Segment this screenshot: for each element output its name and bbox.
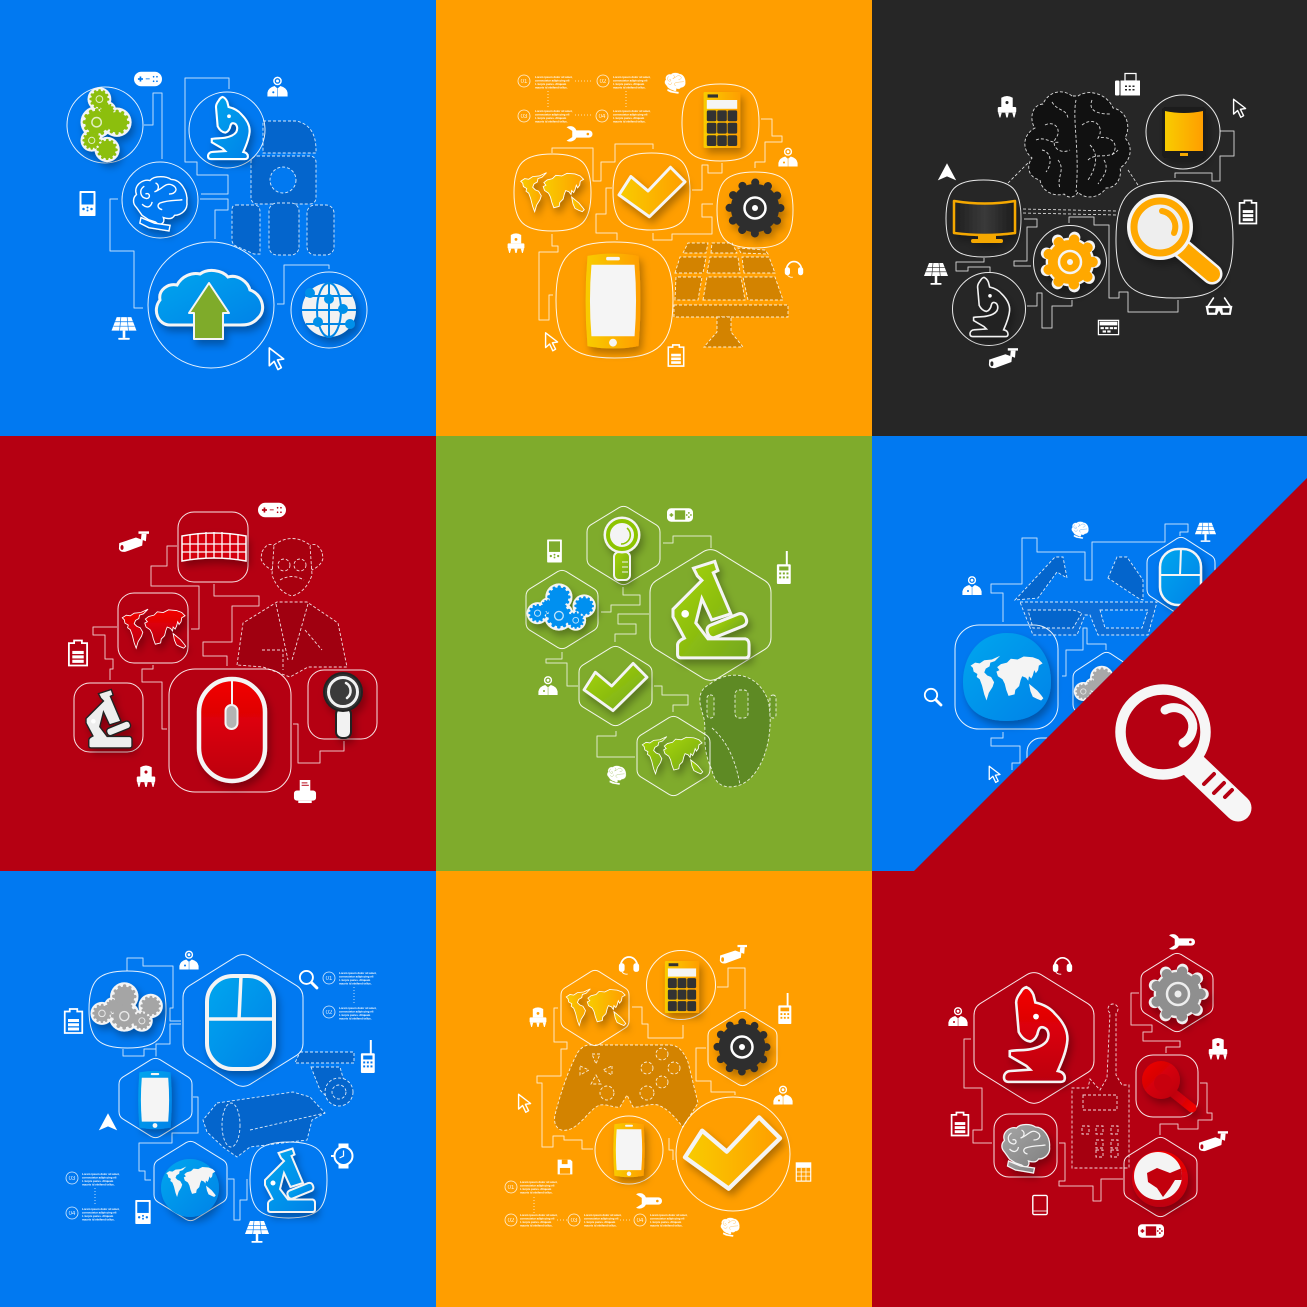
globe tile xyxy=(955,625,1058,729)
steps infographic left: Lorem ipsum dolor sit amet, xyxy=(82,1207,120,1211)
magnifier tile xyxy=(308,670,377,739)
panel: blue and red diagonal xyxy=(872,436,1307,871)
connector lines xyxy=(539,119,782,320)
icon: brain xyxy=(721,1218,740,1237)
steps infographic right: 01 xyxy=(326,976,333,982)
steps infographic right xyxy=(323,971,377,1020)
panel: blue mouse xyxy=(0,871,436,1307)
icon: robot xyxy=(530,1007,546,1027)
microscope hexagon xyxy=(974,973,1094,1103)
icon: cursor xyxy=(1234,99,1246,117)
icon: brain xyxy=(1071,522,1089,539)
steps infographic right: 02 xyxy=(326,1010,333,1016)
steps infographic xyxy=(518,75,651,124)
panel 6 background xyxy=(872,436,1307,871)
microscope circle xyxy=(189,92,265,168)
steps infographic left: t. turpis purus. Aliquam xyxy=(82,1214,114,1218)
icon: battery xyxy=(1240,200,1256,224)
steps infographic left xyxy=(66,1172,120,1222)
steps infographic: consectetur adipiscing eli xyxy=(584,1216,619,1220)
icon: glasses xyxy=(1206,298,1232,315)
icon: doctor xyxy=(962,577,982,595)
steps infographic right: t. turpis purus. Aliquam xyxy=(339,1013,371,1017)
steps infographic xyxy=(505,1180,688,1228)
steps infographic: t. turpis purus. Aliquam xyxy=(584,1220,616,1224)
steps infographic: 03 xyxy=(571,1218,578,1224)
icon: gamepad xyxy=(258,503,286,517)
gears hexagon xyxy=(526,570,598,649)
connector lines xyxy=(93,546,344,763)
icon: psp xyxy=(1138,1224,1164,1238)
dashed solar panel xyxy=(674,243,788,347)
dashed gamepad xyxy=(555,1045,698,1130)
connector lines xyxy=(546,536,711,757)
steps infographic: Lorem ipsum dolor sit amet, xyxy=(613,109,651,113)
steps infographic: consectetur adipiscing eli xyxy=(613,112,648,116)
check circle xyxy=(676,1097,790,1211)
steps infographic right: t. turpis purus. Aliquam xyxy=(339,978,371,982)
steps infographic right: Lorem ipsum dolor sit amet, xyxy=(339,1006,377,1010)
map hexagon xyxy=(637,716,710,796)
icon: printer xyxy=(294,780,316,803)
steps infographic: 02 xyxy=(600,79,607,85)
panel 8 background xyxy=(436,871,872,1307)
monitor squircle xyxy=(946,180,1021,257)
panel 2 background xyxy=(436,0,872,436)
icon: cursor xyxy=(519,1094,531,1112)
steps infographic right: consectetur adipiscing eli xyxy=(339,974,374,978)
icon: battery xyxy=(69,641,87,665)
steps infographic: mauris id eleifend tellus. xyxy=(613,120,646,124)
icon: navigation arrow xyxy=(938,163,956,180)
globe hexagon xyxy=(1124,1137,1197,1217)
icon: brain xyxy=(607,766,626,785)
steps infographic: t. turpis purus. Aliquam xyxy=(535,82,567,86)
dashed camera xyxy=(203,1052,354,1157)
icon: floppy xyxy=(558,1160,572,1174)
steps infographic: Lorem ipsum dolor sit amet, xyxy=(584,1213,622,1217)
mouse hexagon xyxy=(1147,537,1215,615)
panel 4 background xyxy=(0,436,436,871)
steps infographic: consectetur adipiscing eli xyxy=(535,78,570,82)
check squircle xyxy=(613,153,690,230)
big magnifier icon xyxy=(1120,690,1238,808)
check hexagon xyxy=(579,646,652,726)
icon: gamepad xyxy=(134,72,162,86)
steps infographic: consectetur adipiscing eli xyxy=(650,1216,685,1220)
steps infographic: Lorem ipsum dolor sit amet, xyxy=(535,75,573,79)
icon: headset xyxy=(1053,958,1072,974)
steps infographic: 02 xyxy=(508,1218,515,1224)
microscope hexagon xyxy=(650,550,771,680)
steps infographic: 04 xyxy=(599,114,606,120)
globe hexagon xyxy=(154,1141,227,1221)
connector lines xyxy=(964,993,1212,1201)
icon: camera xyxy=(989,348,1018,368)
panel: orange phone xyxy=(436,0,872,436)
icon: fax xyxy=(1115,74,1140,96)
microscope circle xyxy=(952,272,1026,346)
gears circle xyxy=(67,87,143,163)
icon: cursor xyxy=(269,348,284,370)
steps infographic: 04 xyxy=(637,1218,644,1224)
icon: solar panel xyxy=(245,1221,269,1243)
connector lines xyxy=(991,524,1188,770)
icon: headset xyxy=(619,957,639,974)
panel 9 background xyxy=(872,871,1307,1307)
magnifier hexagon xyxy=(587,506,660,585)
microscope squircle xyxy=(250,1142,327,1218)
icon: keyboard xyxy=(1098,320,1119,335)
steps infographic: 01 xyxy=(508,1185,515,1191)
steps infographic: Lorem ipsum dolor sit amet, xyxy=(613,75,651,79)
icon: watch xyxy=(331,1144,352,1168)
icon: navigation arrow xyxy=(99,1113,117,1130)
gears hexagon xyxy=(1072,652,1124,710)
icon: solar panel xyxy=(112,317,136,340)
magnifier tile xyxy=(1136,1055,1198,1117)
icon: headset xyxy=(785,262,803,277)
gear circle xyxy=(1034,226,1106,298)
mouse hexagon xyxy=(183,955,303,1086)
icon: psp xyxy=(667,508,693,522)
steps infographic: mauris id eleifend tellus. xyxy=(650,1224,683,1228)
icon: calculator xyxy=(796,1163,811,1181)
icon: magnifier xyxy=(300,971,317,988)
icon: doctor xyxy=(778,148,798,166)
globe circle xyxy=(291,272,367,348)
steps infographic: consectetur adipiscing eli xyxy=(613,78,648,82)
microscope tile xyxy=(74,683,143,752)
icon: handheld xyxy=(135,1200,151,1224)
icon: battery xyxy=(65,1009,82,1033)
phone circle xyxy=(595,1116,663,1184)
connector lines xyxy=(537,968,745,1160)
icon: walkie talkie xyxy=(361,1040,375,1073)
steps infographic left: consectetur adipiscing eli xyxy=(82,1176,117,1180)
steps infographic: mauris id eleifend tellus. xyxy=(535,120,568,124)
steps infographic: mauris id eleifend tellus. xyxy=(520,1190,553,1194)
brain circle xyxy=(122,162,198,238)
panel 3 background xyxy=(872,0,1307,436)
icon: battery xyxy=(668,345,684,366)
phone hexagon xyxy=(119,1058,192,1138)
icon: robot xyxy=(508,233,524,253)
steps infographic: t. turpis purus. Aliquam xyxy=(613,82,645,86)
icon: cursor xyxy=(546,333,558,351)
icon: handheld xyxy=(547,540,562,562)
dashed person xyxy=(237,538,347,677)
gear squircle xyxy=(717,172,793,248)
steps infographic left: Lorem ipsum dolor sit amet, xyxy=(82,1172,120,1176)
steps infographic: Lorem ipsum dolor sit amet, xyxy=(535,109,573,113)
panel: dark magnifier xyxy=(872,0,1307,436)
icon: walkie talkie xyxy=(777,551,791,584)
keypad circle xyxy=(646,950,716,1020)
icon: doctor xyxy=(948,1008,968,1026)
icon: wrench xyxy=(567,126,593,142)
keypad squircle xyxy=(682,84,759,161)
icon: robot xyxy=(1209,1038,1227,1060)
steps infographic: Lorem ipsum dolor sit amet, xyxy=(650,1213,688,1217)
steps infographic: Lorem ipsum dolor sit amet, xyxy=(520,1213,558,1217)
magnifier squircle xyxy=(1116,181,1233,298)
mouse tile xyxy=(169,669,291,792)
steps infographic: 03 xyxy=(521,114,528,120)
icon: doctor xyxy=(773,1086,793,1104)
steps infographic: mauris id eleifend tellus. xyxy=(613,86,646,90)
steps infographic: consectetur adipiscing eli xyxy=(520,1216,555,1220)
dashed mouse xyxy=(700,675,776,787)
steps infographic: t. turpis purus. Aliquam xyxy=(650,1220,682,1224)
icon: battery xyxy=(952,1112,968,1136)
icon: doctor xyxy=(538,677,558,695)
tablet circle xyxy=(1146,95,1220,169)
steps infographic: Lorem ipsum dolor sit amet, xyxy=(520,1180,558,1184)
panel: green microscope xyxy=(436,436,872,871)
icon: camera xyxy=(1199,1131,1228,1151)
icon: wrench xyxy=(636,1193,662,1209)
map hexagon xyxy=(561,970,629,1046)
steps infographic: t. turpis purus. Aliquam xyxy=(613,116,645,120)
steps infographic right: mauris id eleifend tellus. xyxy=(339,1016,372,1020)
icon: handheld xyxy=(80,191,96,216)
gear hexagon xyxy=(708,1011,777,1086)
connector lines xyxy=(123,958,247,1220)
icon: walkie talkie xyxy=(778,993,791,1024)
clipped blue content xyxy=(925,522,1216,798)
icon: doctor xyxy=(267,77,288,96)
steps infographic: mauris id eleifend tellus. xyxy=(520,1224,553,1228)
icon: camera xyxy=(119,531,149,552)
icon: robot xyxy=(137,765,155,787)
connector lines xyxy=(956,131,1234,328)
steps infographic: consectetur adipiscing eli xyxy=(535,112,570,116)
panel 7 background xyxy=(0,871,436,1307)
steps infographic: mauris id eleifend tellus. xyxy=(535,86,568,90)
icon: doctor xyxy=(179,951,199,970)
icon: tablet xyxy=(1033,1195,1047,1215)
steps infographic left: 03 xyxy=(69,1176,76,1182)
brain tile xyxy=(994,1114,1057,1177)
steps infographic: t. turpis purus. Aliquam xyxy=(520,1187,552,1191)
steps infographic: mauris id eleifend tellus. xyxy=(584,1224,617,1228)
keyboard tile xyxy=(178,512,248,582)
steps infographic right: mauris id eleifend tellus. xyxy=(339,982,372,986)
panel 5 background xyxy=(436,436,872,871)
panel 1 background xyxy=(0,0,436,436)
icon: cursor xyxy=(989,766,1000,782)
partial hexagon xyxy=(1026,738,1048,758)
steps infographic: consectetur adipiscing eli xyxy=(520,1184,555,1188)
panel: red microscope xyxy=(872,871,1307,1307)
cloud upload circle xyxy=(148,242,274,368)
gears squircle xyxy=(89,971,166,1048)
icon: magnifier xyxy=(925,689,941,705)
steps infographic right: consectetur adipiscing eli xyxy=(339,1010,374,1014)
dashed glasses xyxy=(1015,557,1157,635)
phone squircle xyxy=(556,242,673,358)
connector lines xyxy=(110,78,329,308)
panel: blue cloud upload xyxy=(0,0,436,436)
steps infographic left: mauris id eleifend tellus. xyxy=(82,1218,115,1222)
dashed walkie talkie xyxy=(1072,1004,1129,1168)
icon: solar panel xyxy=(1195,523,1216,542)
map squircle xyxy=(514,154,591,231)
steps infographic left: mauris id eleifend tellus. xyxy=(82,1182,115,1186)
map tile xyxy=(118,593,188,663)
steps infographic: t. turpis purus. Aliquam xyxy=(520,1220,552,1224)
steps infographic left: consectetur adipiscing eli xyxy=(82,1210,117,1214)
icon: robot xyxy=(998,96,1016,118)
steps infographic: 01 xyxy=(521,79,528,85)
dashed brain xyxy=(1008,92,1138,215)
steps infographic right: Lorem ipsum dolor sit amet, xyxy=(339,971,377,975)
panel: orange gamepad xyxy=(436,871,872,1307)
icon: solar panel xyxy=(924,263,948,285)
panel: red mouse xyxy=(0,436,436,871)
icon: brain xyxy=(665,73,686,94)
icon: camera xyxy=(720,945,747,963)
steps infographic left: 04 xyxy=(69,1211,76,1217)
steps infographic left: t. turpis purus. Aliquam xyxy=(82,1179,114,1183)
icon: wrench xyxy=(1169,934,1195,950)
steps infographic: t. turpis purus. Aliquam xyxy=(535,116,567,120)
red diagonal triangle xyxy=(914,478,1307,871)
dashed walkie robot shape xyxy=(232,121,334,255)
gear hexagon xyxy=(1141,953,1213,1032)
